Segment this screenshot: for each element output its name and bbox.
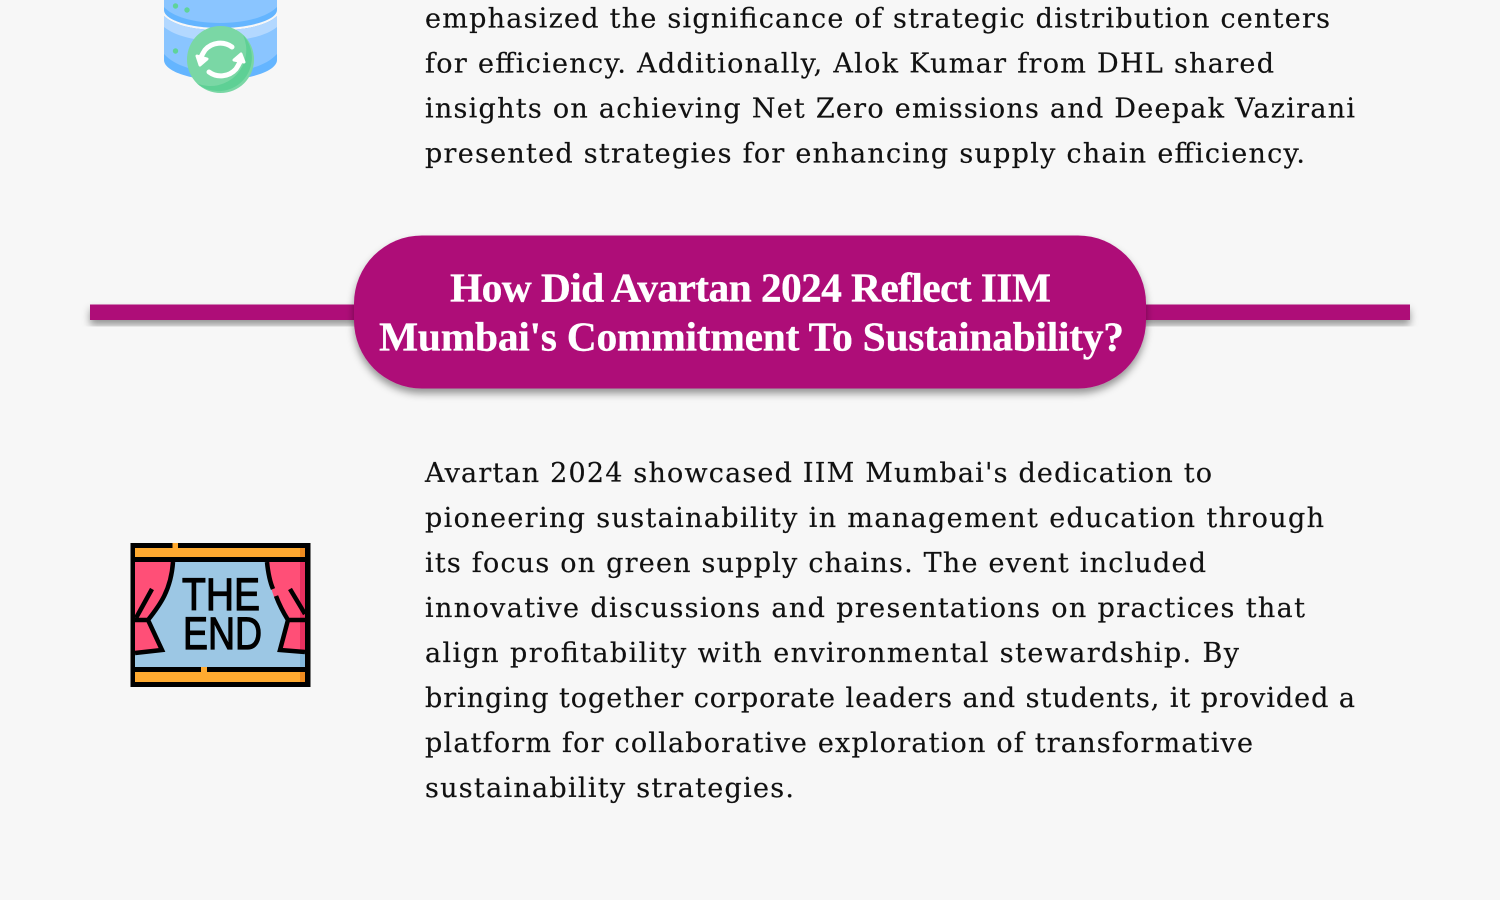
text block: conclusion paragraph <box>424 458 1355 804</box>
text block: conclusion paragraph: its focus on green supply chains. The event included <box>425 548 1206 579</box>
heading pill: Mumbai's Commitment To Sustainability? <box>379 314 1124 360</box>
text block: top paragraph: emphasized the significance of strategic distribution centers <box>425 4 1330 34</box>
text block: conclusion paragraph: bringing together corporate leaders and students, it provided a <box>425 683 1355 714</box>
icon: the end curtain: END <box>183 608 262 659</box>
icon: the end curtain <box>130 543 310 687</box>
icon: the end curtain: THE <box>182 569 260 620</box>
heading pill <box>354 236 1146 388</box>
heading band with line <box>90 236 1410 388</box>
text block: top paragraph: presented strategies for enhancing supply chain efficiency. <box>425 138 1305 170</box>
text block: conclusion paragraph: platform for collaborative exploration of transformative <box>425 728 1253 759</box>
text block: top paragraph: insights on achieving Net Zero emissions and Deepak Vazirani <box>425 94 1355 124</box>
text block: conclusion paragraph: innovative discussions and presentations on practices that <box>425 593 1305 624</box>
text block: top paragraph: for efficiency. Additionally, Alok Kumar from DHL shared <box>425 48 1274 80</box>
text block: conclusion paragraph: align profitability with environmental stewardship. By <box>425 638 1240 669</box>
text block: conclusion paragraph: Avartan 2024 showcased IIM Mumbai's dedication to <box>424 458 1212 489</box>
text block: top paragraph <box>425 4 1355 170</box>
icon: database sync <box>164 0 277 93</box>
text block: conclusion paragraph: sustainability strategies. <box>425 773 794 804</box>
heading pill: How Did Avartan 2024 Reflect IIM <box>450 264 1051 310</box>
text block: conclusion paragraph: pioneering sustainability in management education through <box>425 503 1324 534</box>
